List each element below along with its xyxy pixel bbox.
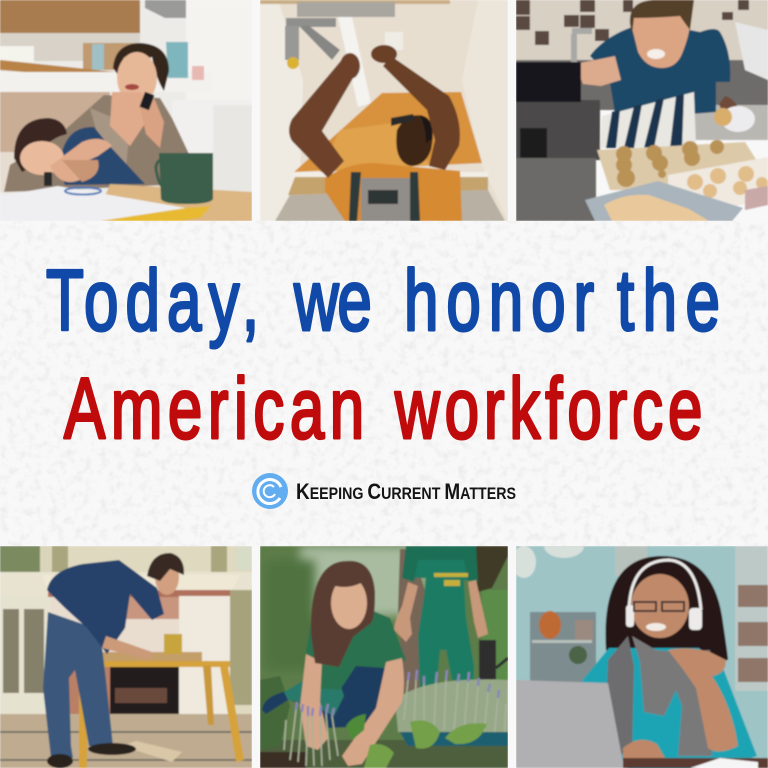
photo: baker filming with a camera bbox=[516, 0, 768, 221]
photo: carpenter at a fireplace bbox=[0, 546, 252, 768]
photo: plumber under a sink bbox=[260, 0, 508, 221]
headline line 1: we bbox=[293, 252, 372, 348]
logo: Keeping Current Matters bbox=[252, 473, 516, 509]
photo: call-center worker at laptop bbox=[512, 534, 768, 768]
tree trunk bbox=[398, 549, 428, 692]
gardener bbox=[262, 665, 385, 728]
carpenter bbox=[43, 612, 113, 758]
plumber bbox=[325, 163, 462, 221]
logo wordmark: KEEPING CURRENT MATTERS bbox=[296, 479, 516, 504]
headline line 1: honor bbox=[404, 252, 594, 348]
laptop and desk bbox=[516, 680, 624, 768]
icon: blue swirl bbox=[252, 473, 288, 509]
photo: mother on phone holding child bbox=[0, 0, 252, 221]
headline line 1: Today, bbox=[46, 252, 259, 348]
baker bbox=[590, 24, 730, 120]
headline line 1 bbox=[46, 252, 720, 348]
headline line 2: American bbox=[64, 360, 364, 456]
leaves and tray bbox=[400, 732, 508, 746]
child bbox=[57, 127, 145, 185]
worker bbox=[605, 556, 728, 664]
counter, trays bbox=[516, 158, 596, 221]
table, mug, papers bbox=[95, 184, 252, 221]
headline bbox=[46, 252, 720, 456]
photo: gardeners with lavender bbox=[260, 546, 508, 768]
headline line 1: the bbox=[617, 252, 720, 348]
woman bbox=[4, 95, 191, 192]
headline line 2: workforce bbox=[394, 360, 702, 456]
camera and tripod bbox=[516, 62, 581, 102]
coworker in overalls bbox=[414, 558, 474, 688]
lavender plants bbox=[284, 670, 506, 766]
headline line 2 bbox=[64, 360, 702, 456]
sawhorse table bbox=[100, 652, 202, 662]
foliage bbox=[396, 678, 508, 733]
